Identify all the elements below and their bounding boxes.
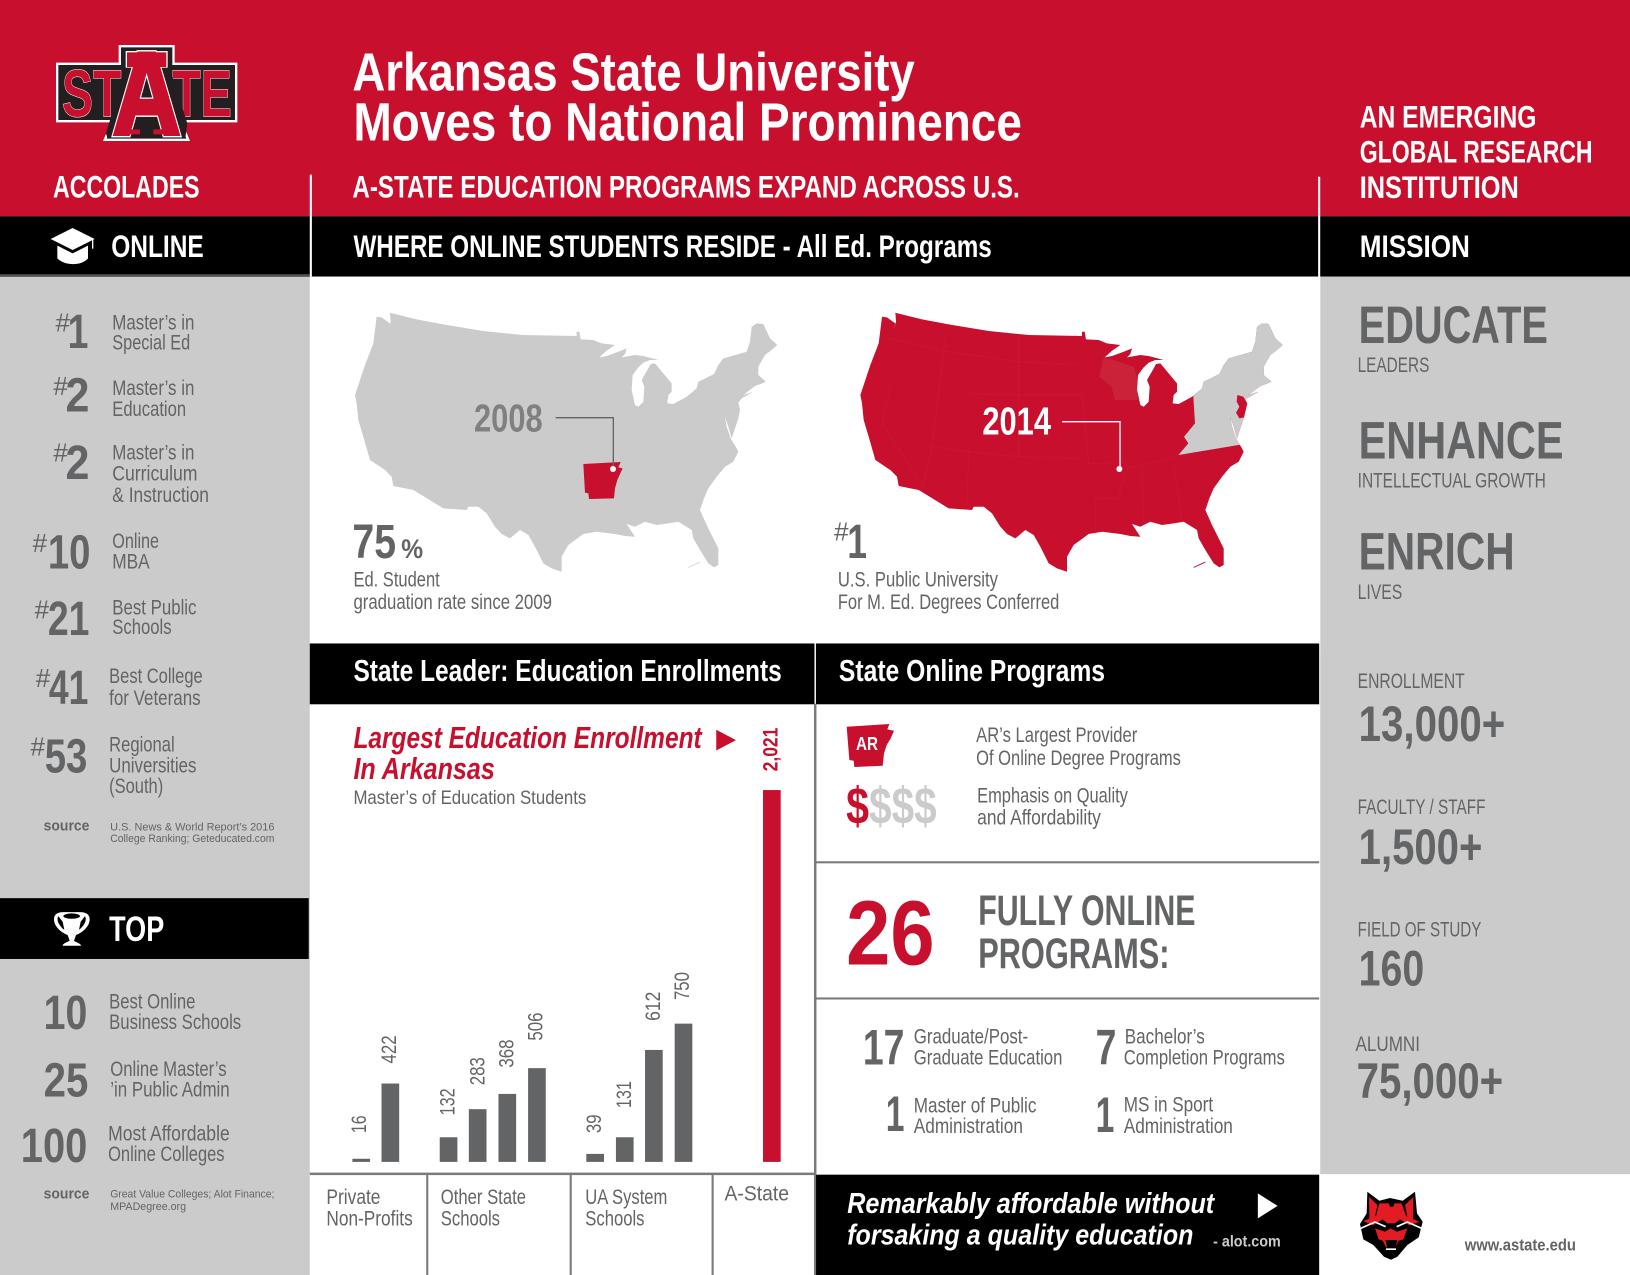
heading: state leader: State Leader: Education Enrollments bbox=[353, 655, 782, 688]
black section band bbox=[0, 216, 1630, 277]
top 25: 25 bbox=[44, 1055, 88, 1108]
university statistics bbox=[1356, 670, 1505, 1109]
logo: A-State bbox=[56, 28, 237, 159]
label: 2014: 2014 bbox=[982, 401, 1051, 444]
count: 17 graduate: 17 bbox=[863, 1019, 904, 1075]
stat: enrollment: ENROLLMENT bbox=[1358, 670, 1465, 693]
enhance: ENHANCE bbox=[1359, 411, 1563, 470]
stat: #1 public university: # bbox=[834, 517, 849, 547]
title: Moves to National Prominence bbox=[353, 92, 1022, 152]
stat: 75 percent graduation rate: Ed. Student bbox=[353, 568, 440, 591]
panel: online rankings bbox=[30, 306, 274, 845]
logo: A-State: ST bbox=[62, 57, 121, 131]
count: 1 sport administration: MS in Sport bbox=[1124, 1093, 1213, 1116]
text: quality and affordability: Emphasis on Quality bbox=[977, 785, 1128, 808]
ranking #2 education bbox=[53, 370, 194, 423]
stat: #1 public university bbox=[834, 516, 1059, 614]
ranking #21: Best Public bbox=[112, 596, 196, 619]
label: 2008: 2008 bbox=[474, 397, 543, 440]
ranking #41: for Veterans bbox=[109, 687, 201, 710]
heading: education programs: A-STATE EDUCATION PROGRAMS EXPAND ACROSS U.S. bbox=[352, 170, 1020, 205]
enrich: ENRICH bbox=[1359, 523, 1515, 582]
ranking #1 bbox=[55, 306, 194, 359]
count: 17 graduate: Graduate/Post- bbox=[914, 1026, 1028, 1049]
title bbox=[352, 42, 1022, 152]
map: 2008 bbox=[355, 313, 777, 572]
source note: top: Great Value Colleges; Alot Finance; bbox=[110, 1189, 274, 1201]
top 10: Business Schools bbox=[109, 1011, 241, 1034]
top 10: Best Online bbox=[109, 990, 195, 1013]
text: largest provider: Of Online Degree Programs bbox=[976, 747, 1181, 770]
right column background bbox=[1320, 277, 1630, 1174]
count: 7 bachelor's: Completion Programs bbox=[1124, 1046, 1285, 1069]
bar values: 612 bbox=[642, 992, 665, 1021]
arrow bbox=[1258, 1193, 1278, 1218]
ranking #10: Online bbox=[112, 530, 159, 553]
stat: faculty and staff bbox=[1358, 796, 1486, 875]
callout: affordable quote bbox=[816, 1175, 1319, 1275]
ranking #53: Regional bbox=[109, 734, 175, 757]
bar values: 750 bbox=[671, 972, 694, 1000]
heading: accolades: ACCOLADES bbox=[53, 170, 200, 205]
white column dividers bbox=[310, 175, 1320, 655]
icon: dollar signs: $$$ bbox=[869, 777, 937, 835]
bar chart: enrollments bbox=[348, 728, 783, 1162]
text: largest provider bbox=[976, 724, 1181, 770]
ranking #2 education: Education bbox=[112, 398, 186, 421]
count: 7 bachelor's: Bachelor’s bbox=[1125, 1026, 1205, 1049]
text: quality and affordability bbox=[977, 785, 1128, 829]
count: 1 public administration: 1 bbox=[886, 1086, 904, 1142]
ranking #41: # bbox=[35, 663, 50, 693]
source note: top bbox=[44, 1187, 274, 1213]
stat: field of study bbox=[1358, 919, 1481, 996]
source note: online: source bbox=[44, 819, 89, 835]
ranking #41: 41 bbox=[49, 662, 88, 715]
count: 7 bachelor's: 7 bbox=[1096, 1019, 1116, 1075]
count: 17 graduate: Graduate Education bbox=[914, 1046, 1062, 1069]
count: 1 public administration: Master of Public bbox=[914, 1094, 1036, 1117]
ranking #1: 1 bbox=[68, 306, 88, 359]
bar values: 2,021 bbox=[760, 728, 783, 771]
ranking #53: (South) bbox=[109, 775, 163, 798]
heading: online: ONLINE bbox=[111, 229, 204, 264]
bar values: 506 bbox=[525, 1013, 548, 1041]
ranking #1: Master’s in bbox=[112, 312, 194, 335]
title: Arkansas State University bbox=[352, 42, 915, 102]
ranking #21 bbox=[34, 593, 196, 646]
stat: 75 percent graduation rate bbox=[352, 516, 552, 614]
stat: alumni bbox=[1356, 1033, 1503, 1109]
icon: graduation cap bbox=[51, 228, 95, 264]
count: 1 sport administration: 1 bbox=[1096, 1087, 1114, 1143]
heading: mission: MISSION bbox=[1360, 229, 1470, 264]
ranking #41: Best College bbox=[109, 665, 203, 688]
stat: faculty and staff: FACULTY / STAFF bbox=[1358, 796, 1486, 819]
stat: enrollment: 13,000+ bbox=[1359, 696, 1505, 752]
chart category labels: A-State bbox=[725, 1183, 789, 1206]
enrich: LIVES bbox=[1358, 581, 1402, 604]
heading: emerging global research institution bbox=[1360, 99, 1593, 205]
heading: where online students reside: WHERE ONLINE STUDENTS RESIDE - All Ed. Programs bbox=[353, 229, 992, 264]
chart category labels: Other State bbox=[441, 1186, 526, 1209]
arrow bbox=[716, 730, 736, 751]
bar values: 283 bbox=[466, 1057, 489, 1085]
ranking #2 curriculum: & Instruction bbox=[112, 484, 209, 507]
stat: enrollment bbox=[1358, 670, 1505, 752]
ranking #2 curriculum: Curriculum bbox=[112, 462, 198, 485]
source note: online: College Ranking; Geteducated.com bbox=[110, 833, 274, 845]
ranking #2 education: # bbox=[53, 371, 68, 401]
ranking #10: # bbox=[32, 528, 47, 558]
source note: online bbox=[44, 819, 274, 845]
count: 7 bachelor's bbox=[1096, 1019, 1285, 1075]
panel: top rankings bbox=[21, 987, 274, 1213]
chart callout: largest education enrollment: Largest Education Enrollment bbox=[353, 722, 703, 755]
heading: emerging global research institution: INSTITUTION bbox=[1360, 170, 1519, 205]
ranking #21: Schools bbox=[112, 616, 172, 639]
ranking #10: 10 bbox=[48, 527, 90, 580]
ranking #2 education: 2 bbox=[65, 370, 89, 423]
chart category labels bbox=[326, 1183, 789, 1231]
source note: top: MPADegree.org bbox=[110, 1201, 186, 1213]
bar values bbox=[348, 728, 783, 1133]
website: www.astate.edu bbox=[1464, 1236, 1576, 1255]
stat: 26 fully online programs: 26 bbox=[846, 883, 935, 985]
ranking #10 bbox=[32, 527, 159, 580]
top 100: Most Affordable bbox=[108, 1122, 230, 1145]
ranking #10: MBA bbox=[112, 551, 150, 574]
top 25: Online Master’s bbox=[110, 1058, 227, 1081]
heading: state online programs: State Online Programs bbox=[839, 655, 1105, 688]
stat: #1 public university: 1 bbox=[847, 516, 867, 569]
header band bbox=[0, 0, 1630, 216]
source note: top: source bbox=[44, 1187, 89, 1203]
icon: Arkansas: AR bbox=[856, 733, 878, 754]
stat: 26 fully online programs: FULLY ONLINE bbox=[978, 887, 1195, 935]
map: 2014 bbox=[860, 313, 1283, 572]
ranking #2 education: Master’s in bbox=[112, 377, 194, 400]
chart category labels: Schools bbox=[441, 1208, 500, 1231]
chart category labels: Schools bbox=[585, 1208, 645, 1231]
icon: red wolf mascot bbox=[1360, 1192, 1423, 1260]
chart callout: largest education enrollment: Master’s of Education Students bbox=[353, 787, 586, 809]
ranking #53: 53 bbox=[45, 730, 87, 783]
chart category labels: UA System bbox=[585, 1186, 667, 1209]
text: quality and affordability: and Affordability bbox=[977, 806, 1101, 829]
count: 1 public administration bbox=[886, 1086, 1036, 1142]
stat: field of study: FIELD OF STUDY bbox=[1358, 919, 1481, 942]
stat: field of study: 160 bbox=[1359, 940, 1424, 996]
bar values: 39 bbox=[583, 1114, 606, 1133]
top 10: 10 bbox=[44, 987, 87, 1040]
stat: 75 percent graduation rate: graduation rate since 2009 bbox=[353, 591, 552, 614]
ranking #2 curriculum bbox=[53, 437, 209, 507]
stat: 75 percent graduation rate: % bbox=[401, 534, 423, 564]
callout: affordable quote: Remarkably affordable without bbox=[847, 1188, 1215, 1220]
stat: alumni: ALUMNI bbox=[1356, 1033, 1420, 1056]
educate bbox=[1358, 296, 1548, 377]
enhance bbox=[1358, 411, 1563, 493]
bar values: 132 bbox=[436, 1088, 459, 1115]
enrich bbox=[1358, 523, 1515, 604]
black band: top bbox=[0, 898, 309, 959]
bar values: 131 bbox=[613, 1081, 636, 1108]
callout: affordable quote: - alot.com bbox=[1213, 1233, 1281, 1250]
icon: dollar signs: $ bbox=[846, 777, 869, 835]
logo: A-State: A bbox=[113, 28, 181, 159]
chart category labels: Private bbox=[326, 1186, 380, 1209]
bar values: 368 bbox=[496, 1040, 519, 1068]
bar values: 16 bbox=[348, 1115, 371, 1133]
ranking #1: Special Ed bbox=[112, 331, 190, 354]
stat: #1 public university: U.S. Public University bbox=[838, 568, 998, 591]
chart category labels: Non-Profits bbox=[326, 1208, 413, 1231]
icon: dollar signs bbox=[846, 777, 937, 835]
icon: Arkansas bbox=[847, 724, 894, 767]
ranking #21: # bbox=[34, 595, 49, 625]
ranking #53 bbox=[30, 730, 196, 798]
heading: top: TOP bbox=[109, 910, 164, 949]
source note: online: U.S. News & World Report’s 2016 bbox=[110, 822, 274, 834]
ranking #21: 21 bbox=[48, 593, 89, 646]
stat: alumni: 75,000+ bbox=[1357, 1053, 1503, 1109]
stat: 75 percent graduation rate: 75 bbox=[352, 516, 396, 569]
ranking #2 curriculum: # bbox=[53, 438, 68, 468]
bar values: 422 bbox=[378, 1035, 401, 1063]
ranking #53: # bbox=[30, 732, 45, 762]
ranking #2 curriculum: 2 bbox=[65, 437, 89, 490]
program counts bbox=[863, 1019, 1285, 1143]
top 100 bbox=[21, 1120, 230, 1173]
ranking #53: Universities bbox=[109, 754, 196, 777]
stat: 26 fully online programs: PROGRAMS: bbox=[978, 930, 1169, 978]
count: 1 sport administration: Administration bbox=[1124, 1115, 1233, 1138]
educate: LEADERS bbox=[1358, 354, 1429, 377]
educate: EDUCATE bbox=[1359, 296, 1548, 355]
top 100: Online Colleges bbox=[108, 1143, 225, 1166]
ranking #2 curriculum: Master’s in bbox=[112, 441, 194, 464]
count: 17 graduate bbox=[863, 1019, 1062, 1075]
stat: 26 fully online programs bbox=[846, 883, 1195, 985]
enhance: INTELLECTUAL GROWTH bbox=[1358, 470, 1546, 493]
stat: #1 public university: For M. Ed. Degrees Conferred bbox=[838, 591, 1059, 614]
ranking #41 bbox=[35, 662, 203, 715]
top 10 bbox=[44, 987, 241, 1040]
logo: A-State: TE bbox=[172, 57, 232, 131]
count: 1 public administration: Administration bbox=[914, 1115, 1023, 1138]
stat: faculty and staff: 1,500+ bbox=[1359, 819, 1482, 875]
mission statements bbox=[1358, 296, 1563, 604]
left column background bbox=[0, 277, 310, 1275]
heading: emerging global research institution: AN EMERGING bbox=[1360, 99, 1536, 134]
count: 1 sport administration bbox=[1096, 1087, 1233, 1143]
top 25 bbox=[44, 1055, 230, 1108]
text: largest provider: AR’s Largest Provider bbox=[976, 724, 1137, 747]
icon: trophy bbox=[54, 912, 90, 946]
chart callout: largest education enrollment bbox=[353, 722, 736, 809]
logo: A-State: A bbox=[113, 28, 181, 159]
chart callout: largest education enrollment: In Arkansas bbox=[353, 753, 495, 786]
callout: affordable quote: forsaking a quality education bbox=[847, 1219, 1193, 1251]
top 100: 100 bbox=[21, 1120, 87, 1173]
ranking #1: # bbox=[55, 308, 70, 338]
top 25: ’in Public Admin bbox=[110, 1079, 230, 1102]
black band: state leader and state online programs bbox=[310, 643, 1319, 704]
